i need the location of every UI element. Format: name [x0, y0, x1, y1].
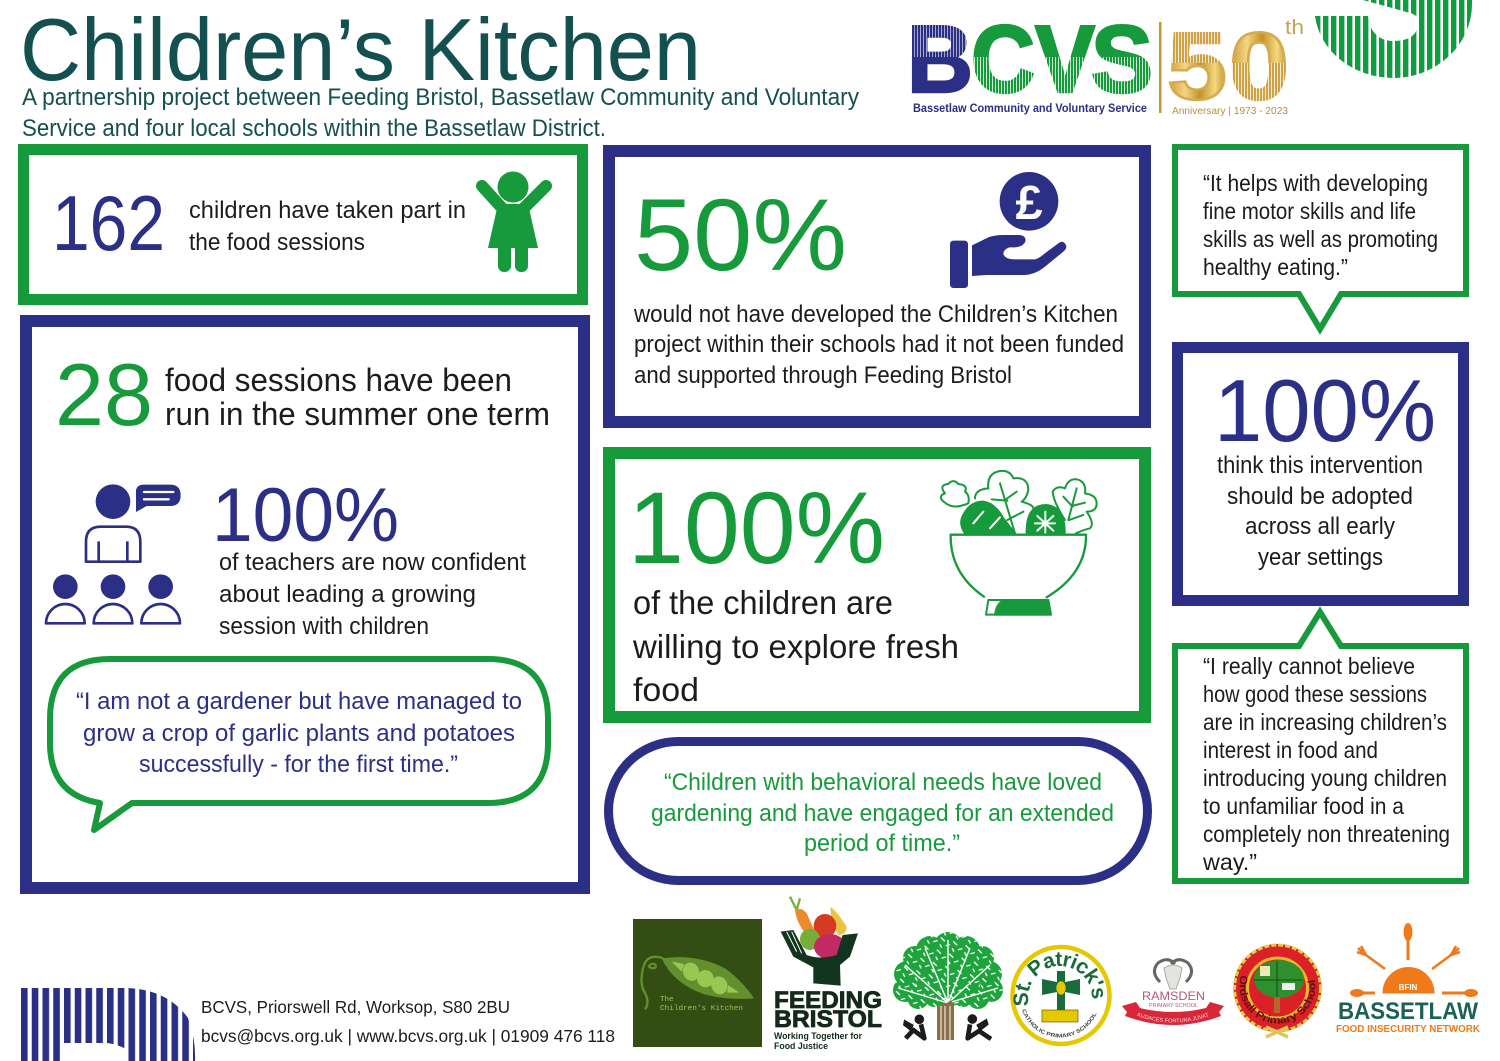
text: teachers confident	[219, 549, 526, 640]
callout: unfamiliar food quote: introducing young children	[1203, 765, 1447, 791]
callout: motor skills quote: “It helps with developing	[1203, 170, 1428, 196]
logo: Ramsden Primary School: AUDACES FORTUNA JUVAT	[1136, 1012, 1208, 1022]
callout: unfamiliar food quote: interest in food and	[1203, 737, 1378, 763]
logo: Ordsall Primary School: Ordsall Primary School	[1240, 976, 1316, 1024]
logo: St Patrick's Catholic Primary School: St. Patrick's	[1013, 952, 1104, 1006]
callout: behavioural needs quote: “Children with behavioral needs have loved	[664, 769, 1102, 796]
callout: unfamiliar food quote: way.”	[1202, 849, 1257, 875]
logo: Ramsden Primary School: PRIMARY SCHOOL	[1149, 1003, 1198, 1009]
callout: unfamiliar food quote: are in increasing children’s	[1203, 709, 1447, 735]
logo: BCVS 50th anniversary: B	[907, 6, 973, 113]
callout: unfamiliar food quote: completely non threatening	[1203, 821, 1450, 847]
callout: motor skills quote: fine motor skills and life	[1203, 198, 1416, 224]
logo: Feeding Bristol: Food Justice	[774, 1041, 828, 1051]
callout: motor skills quote	[1175, 147, 1466, 329]
text: children willing: of the children are	[633, 584, 893, 621]
text: children willing: willing to explore fresh	[632, 628, 959, 665]
text: 50% description: and supported through Feeding Bristol	[634, 362, 1012, 389]
stat: 100% adoption: 100%	[1214, 361, 1436, 460]
callout: unfamiliar food quote	[1175, 612, 1466, 881]
callout: motor skills quote: healthy eating.”	[1203, 254, 1348, 280]
text: adoption description: across all early	[1245, 513, 1395, 540]
logo: Feeding Bristol	[774, 897, 882, 1051]
logo: tree and reading children	[893, 932, 1003, 1040]
text: food sessions run: food sessions have been	[165, 362, 512, 398]
icon: hand with pound coin	[950, 172, 1066, 288]
callout: gardener quote: successfully - for the first time.”	[139, 751, 458, 778]
text: children taken part: children have taken part in	[189, 197, 466, 224]
decorative green striped circle	[1315, 0, 1472, 78]
text: children taken part	[189, 197, 466, 256]
logo: BCVS 50th anniversary: B	[907, 6, 973, 113]
text: 50% description: would not have developed the Children’s Kitchen	[633, 301, 1118, 328]
logo: Feeding Bristol: BRISTOL	[774, 1006, 882, 1033]
text: adoption description: think this intervention	[1217, 452, 1423, 479]
logo: The Children's Kitchen: The	[660, 996, 674, 1004]
subtitle: A partnership project between Feeding Bristol, Bassetlaw Community and Voluntary	[22, 84, 859, 111]
logo: Bassetlaw Food Insecurity Network	[1336, 924, 1480, 1035]
icon: teacher and pupils	[46, 484, 181, 623]
callout: gardener quote	[50, 659, 548, 830]
logo: Bassetlaw Food Insecurity Network: BFIN	[1399, 983, 1418, 992]
logo: St Patrick's Catholic Primary School	[1010, 944, 1112, 1046]
stat: 50%: 50%	[634, 178, 847, 292]
callout: unfamiliar food quote: to unfamiliar food in a	[1203, 793, 1404, 819]
contact details: BCVS, Priorswell Rd, Worksop, S80 2BU	[201, 997, 510, 1017]
logo: Feeding Bristol: Working Together for	[774, 1031, 862, 1041]
logo: BCVS 50th anniversary: Bassetlaw Community and Voluntary Service	[913, 101, 1147, 115]
panel: 162 children	[24, 150, 582, 300]
logo: BCVS 50th anniversary	[912, 19, 1303, 116]
logo: St Patrick's Catholic Primary School: CATHOLIC PRIMARY SCHOOL	[1022, 1009, 1096, 1038]
text: adoption description: should be adopted	[1227, 483, 1413, 510]
logo: BCVS 50th anniversary: S	[1091, 6, 1153, 113]
callout: gardener quote: “I am not a gardener but have managed to	[76, 688, 522, 715]
contact details	[201, 997, 615, 1046]
text: teachers confident: session with children	[219, 613, 429, 640]
callout: unfamiliar food quote: how good these sessions	[1203, 681, 1427, 707]
logo: BCVS 50th anniversary: Anniversary | 1973 - 2023	[1172, 106, 1288, 117]
text: children willing: food	[633, 671, 699, 708]
callout: behavioural needs quote: period of time.”	[804, 830, 960, 857]
logo: BCVS 50th anniversary: C	[971, 6, 1035, 113]
panel: 50% funding	[609, 151, 1145, 422]
logo: The Children's Kitchen: Children's Kitchen	[660, 1005, 743, 1013]
callout: behavioural needs quote: gardening and have engaged for an extended	[651, 800, 1114, 827]
logo: BCVS 50th anniversary: V	[1035, 6, 1095, 113]
text: food sessions run	[165, 362, 550, 432]
logo: Bassetlaw Food Insecurity Network: FOOD INSECURITY NETWORK	[1336, 1023, 1480, 1035]
logo: BCVS 50th anniversary: S	[1091, 6, 1153, 113]
stat: 100% children: 100%	[628, 471, 885, 585]
text: children willing	[632, 584, 959, 708]
callout: unfamiliar food quote: “I really cannot believe	[1203, 653, 1415, 679]
stat: 28: 28	[55, 345, 153, 444]
text: children taken part: the food sessions	[189, 229, 365, 256]
logo: Bassetlaw Food Insecurity Network: BASSETLAW	[1338, 998, 1478, 1025]
callout: behavioural needs quote	[608, 742, 1148, 880]
logo: Ramsden Primary School	[1122, 958, 1224, 1025]
logo: Feeding Bristol: FEEDING	[774, 987, 882, 1014]
subtitle: Service and four local schools within the Bassetlaw District.	[22, 115, 606, 142]
callout: gardener quote: grow a crop of garlic plants and potatoes	[83, 720, 515, 747]
text: teachers confident: of teachers are now confident	[219, 549, 526, 576]
subtitle	[22, 84, 859, 142]
panel: 100% children	[609, 453, 1145, 717]
logo: BCVS 50th anniversary: V	[1035, 6, 1095, 113]
icon: salad bowl	[941, 471, 1097, 615]
decorative navy stripes bottom left	[21, 988, 195, 1061]
contact details: bcvs@bcvs.org.uk | www.bcvs.org.uk | 01909 476 118	[201, 1026, 615, 1046]
panel: 100% adoption	[1178, 348, 1464, 600]
logo: BCVS 50th anniversary: 0	[1229, 13, 1289, 120]
panel: 28 food sessions	[26, 321, 584, 888]
logo: BCVS 50th anniversary: 5	[1167, 13, 1227, 120]
stat: 100% teachers: 100%	[212, 473, 399, 558]
text: teachers confident: about leading a growing	[219, 581, 476, 608]
text: adoption description: year settings	[1258, 544, 1383, 571]
text: 50% description	[633, 301, 1124, 389]
icon: hand with pound coin: £	[1015, 176, 1043, 230]
title: Children’s Kitchen	[20, 0, 701, 99]
text: 50% description: project within their schools had it not been funded	[634, 331, 1124, 358]
stat: 162: 162	[52, 179, 165, 267]
callout: motor skills quote: skills as well as promoting	[1203, 226, 1438, 252]
icon: child	[482, 172, 546, 272]
logo: BCVS 50th anniversary: 5	[1167, 13, 1227, 120]
logo: The Children's Kitchen	[633, 919, 762, 1047]
text: food sessions run: run in the summer one term	[165, 396, 550, 432]
logo: Ramsden Primary School: RAMSDEN	[1142, 991, 1205, 1003]
logo: BCVS 50th anniversary: 0	[1229, 13, 1289, 120]
logo: BCVS 50th anniversary: th	[1285, 17, 1304, 39]
logo: Ordsall Primary School	[1233, 944, 1322, 1039]
logo: BCVS 50th anniversary: C	[971, 6, 1035, 113]
text: adoption description	[1217, 452, 1423, 571]
